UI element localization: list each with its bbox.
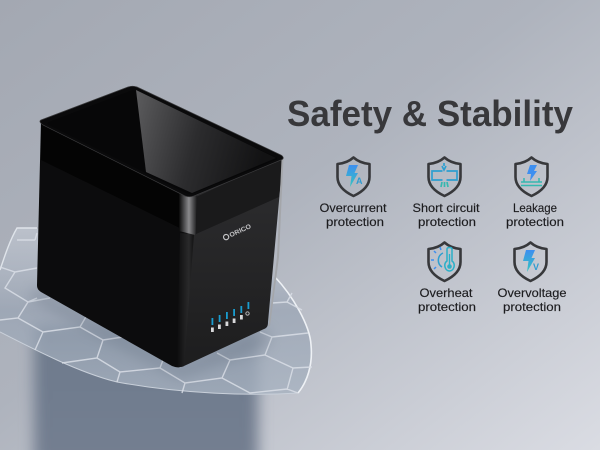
feature: short circuit protection <box>412 158 480 229</box>
right edge highlight <box>268 158 284 326</box>
front upper band <box>196 157 283 234</box>
label: Overvoltage <box>498 286 567 300</box>
feature: overvoltage protection <box>498 242 567 314</box>
label: Overheat <box>420 286 473 300</box>
brand logo: ORICO <box>229 223 252 239</box>
left side face <box>37 120 190 367</box>
feature: overcurrent protection <box>320 158 387 229</box>
icon: shield with bolt A: A <box>356 176 363 186</box>
brand logo <box>223 223 252 242</box>
lid reflection <box>136 90 276 193</box>
contact shadow around device <box>30 287 268 378</box>
left upper band <box>41 120 190 233</box>
feature: leakage protection <box>506 158 564 229</box>
storage enclosure device <box>37 86 284 367</box>
label: protection <box>418 215 476 229</box>
label: Leakage <box>513 201 557 215</box>
label: Overcurrent <box>320 201 387 215</box>
top lid <box>40 86 283 197</box>
title: Safety & Stability <box>287 93 574 134</box>
icon: shield with bolt V: V <box>533 262 539 272</box>
icon: shield with thermometer <box>428 242 460 281</box>
indicator lights <box>211 302 249 332</box>
icon: shield with leak bolt <box>516 158 548 196</box>
label: protection <box>418 300 476 314</box>
label: Short circuit <box>412 201 480 215</box>
front corner strip <box>177 233 194 367</box>
floor shadow column <box>34 325 258 450</box>
feature: overheat protection <box>418 242 476 314</box>
front face <box>178 157 283 367</box>
label: protection <box>326 215 384 229</box>
icon: shield with broken circuit <box>428 158 460 196</box>
lid glass <box>48 90 277 194</box>
label: protection <box>506 215 564 229</box>
front corner highlight <box>179 192 197 235</box>
hexagon shield platform <box>0 228 312 394</box>
label: protection <box>503 300 561 314</box>
